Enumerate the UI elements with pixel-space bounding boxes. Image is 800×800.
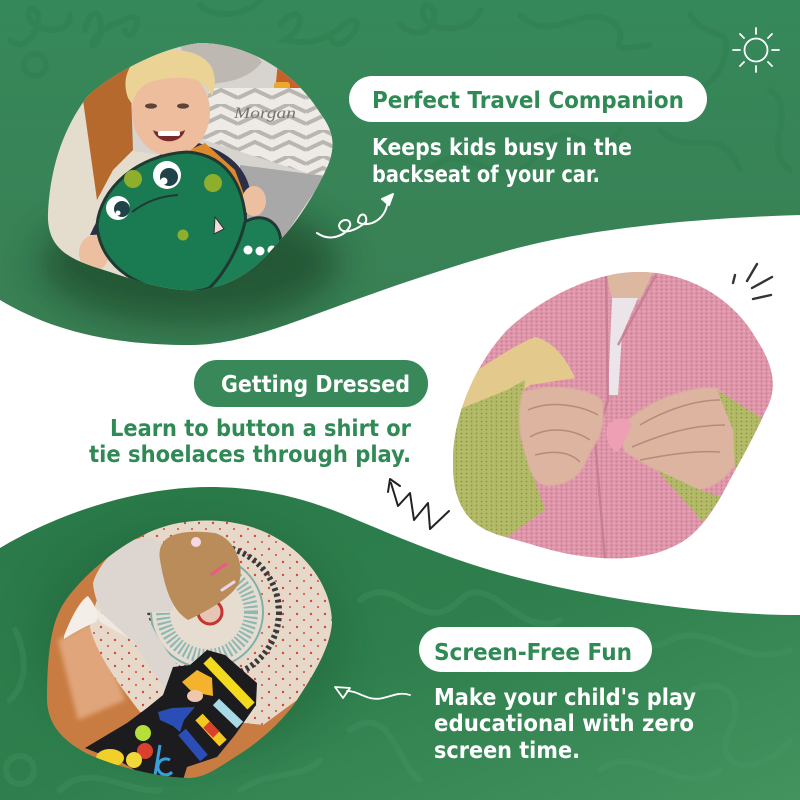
text: screen-free description: screen time. [434, 738, 580, 764]
hair [125, 50, 215, 104]
panel: bottom green background [0, 487, 800, 800]
girl's hand [187, 690, 203, 702]
pill: Getting Dressed [194, 360, 428, 407]
text: travel description: backseat of your car. [372, 162, 600, 188]
cardigan [445, 265, 780, 565]
embroidered name: Morgan [233, 105, 296, 122]
hair clips [212, 564, 234, 590]
text: dressing description: tie shoelaces through play. [89, 442, 411, 468]
hands [79, 186, 266, 271]
icon: sun [733, 28, 779, 72]
mouth [153, 130, 185, 141]
wood door frame [83, 62, 133, 200]
wood floor [40, 515, 340, 785]
text: screen-free description: Make your child's play [434, 685, 696, 711]
wall [40, 40, 340, 295]
left green cuff [448, 380, 545, 537]
photo: boy holding green dinosaur board [40, 40, 340, 295]
hair [160, 532, 241, 620]
left fingers shadow [528, 405, 598, 462]
hair tie [191, 537, 201, 547]
pill: Perfect Travel Companion [349, 76, 707, 122]
face [132, 78, 210, 155]
pants [96, 608, 135, 643]
text: travel description: Keeps kids busy in the [372, 135, 632, 161]
rug [90, 519, 332, 725]
arrow: black zigzag arrow [388, 479, 449, 529]
pillow [180, 43, 262, 84]
bed backdrop [125, 40, 340, 180]
arrow: white wavy arrow [335, 687, 410, 699]
neck [606, 272, 653, 300]
text: dressing description [89, 416, 412, 468]
right hand [622, 388, 736, 490]
blouse [608, 298, 638, 395]
navy shirt [90, 142, 250, 235]
pill: Perfect Travel Companion: Perfect Travel Companion [372, 88, 684, 114]
text: travel description [372, 135, 632, 188]
right fingers shadow [632, 400, 725, 460]
left hand [519, 387, 604, 486]
right cuff [657, 390, 765, 522]
pill: Screen-Free Fun: Screen-Free Fun [434, 640, 632, 666]
eyes [145, 103, 189, 109]
orange toy [274, 68, 302, 90]
button [606, 418, 631, 452]
grey floor [240, 165, 325, 240]
floor sheen [58, 620, 125, 720]
placket [595, 275, 656, 560]
pill: Screen-Free Fun [419, 627, 652, 672]
pill: Getting Dressed: Getting Dressed [221, 372, 410, 398]
text: screen-free description: educational with zero [434, 711, 694, 737]
orange spikes [189, 143, 244, 196]
black busy board [85, 650, 257, 780]
icon: burst lines [733, 264, 772, 299]
photo: girl playing with black board on rug [40, 515, 340, 785]
mandala [147, 546, 279, 678]
shoe [64, 596, 97, 639]
photo: hands buttoning pink cardigan [445, 265, 780, 565]
text: screen-free description [434, 685, 696, 764]
sweater [93, 538, 178, 688]
dinosaur board [97, 152, 281, 292]
arrow: curly white arrow [317, 194, 393, 237]
yellow pocket patch [455, 337, 575, 415]
chevron blanket [198, 88, 340, 176]
panel: top green background [0, 0, 800, 345]
text: dressing description: Learn to button a shirt or [110, 416, 412, 442]
